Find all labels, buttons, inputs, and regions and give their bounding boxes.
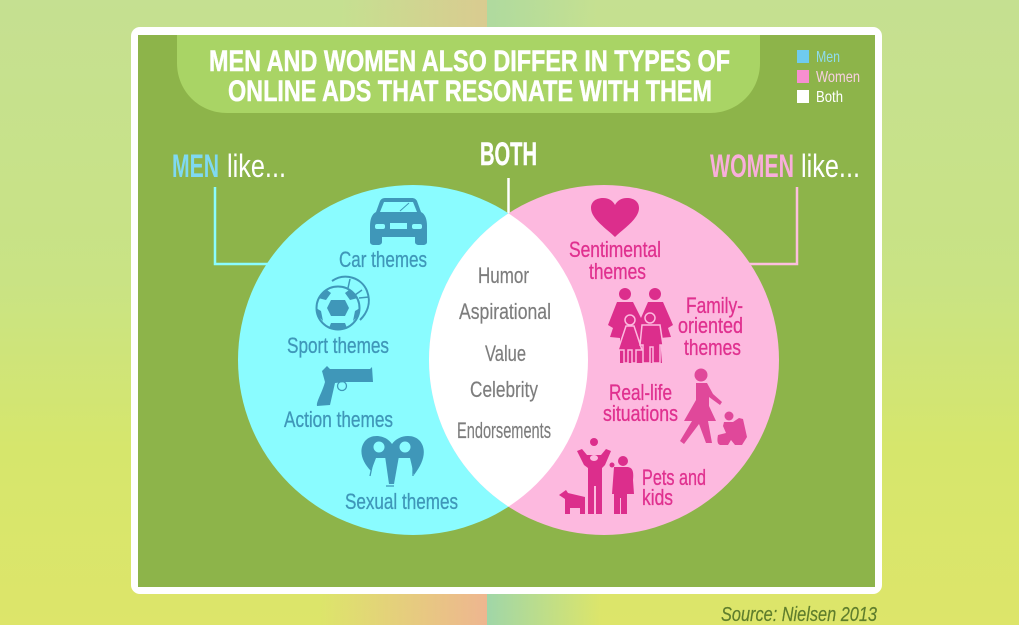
label: humor: Humor — [478, 263, 529, 288]
heading: men like: like... — [227, 148, 286, 184]
label: endorsements: Endorsements — [457, 418, 551, 443]
label: pets and kids: Pets and — [642, 465, 706, 490]
legend: Both — [816, 89, 843, 106]
icon: heart — [591, 198, 639, 237]
legend: Women — [816, 69, 860, 86]
label: sport themes: Sport themes — [287, 333, 389, 358]
label: value: Value — [485, 341, 526, 366]
label: family-oriented themes — [678, 293, 743, 360]
connector: men — [215, 187, 270, 264]
men items — [284, 198, 458, 514]
label: pets and kids — [642, 465, 706, 510]
label: family-oriented themes: oriented — [678, 313, 743, 338]
label: sentimental themes — [569, 237, 661, 284]
panel: main card — [131, 27, 882, 594]
venn: men circle — [238, 185, 588, 535]
label: family-oriented themes: Family- — [686, 293, 743, 318]
icon: ball — [316, 277, 369, 330]
icon: car — [370, 198, 427, 245]
label: real-life situations: Real-life — [609, 380, 672, 405]
label: family-oriented themes: themes — [684, 335, 741, 360]
label: action themes: Action themes — [284, 407, 393, 432]
heading: women like: WOMEN — [710, 148, 794, 184]
heading: men like — [172, 148, 286, 184]
label: sentimental themes: Sentimental — [569, 237, 661, 262]
both items — [457, 263, 551, 443]
heading: both: BOTH — [480, 136, 537, 172]
title banner — [177, 35, 760, 113]
connector: women — [745, 187, 797, 264]
women items — [559, 198, 747, 514]
connector: both — [507, 178, 510, 214]
legend: Men — [816, 49, 840, 66]
label: real-life situations — [603, 380, 678, 426]
label: sentimental themes: themes — [589, 259, 646, 284]
label: real-life situations: situations — [603, 401, 678, 426]
title banner: ONLINE ADS THAT RESONATE WITH THEM — [228, 75, 712, 108]
heading: men like: MEN — [172, 148, 219, 184]
label: celebrity: Celebrity — [470, 377, 538, 402]
label: car themes: Car themes — [339, 247, 427, 272]
venn: women circle — [429, 185, 779, 535]
icon: woman and child — [680, 368, 747, 445]
heading: women like: like... — [801, 148, 860, 184]
venn: overlap — [429, 214, 588, 506]
title banner: MEN AND WOMEN ALSO DIFFER IN TYPES OF — [209, 45, 730, 78]
icon: couple — [361, 436, 424, 486]
icon: parent child dog — [559, 438, 634, 514]
icon: family — [608, 288, 673, 363]
label: pets and kids: kids — [642, 485, 673, 510]
label: sexual themes: Sexual themes — [345, 489, 458, 514]
icon: gun — [317, 366, 373, 406]
legend — [797, 49, 860, 106]
label: aspirational: Aspirational — [459, 299, 551, 324]
